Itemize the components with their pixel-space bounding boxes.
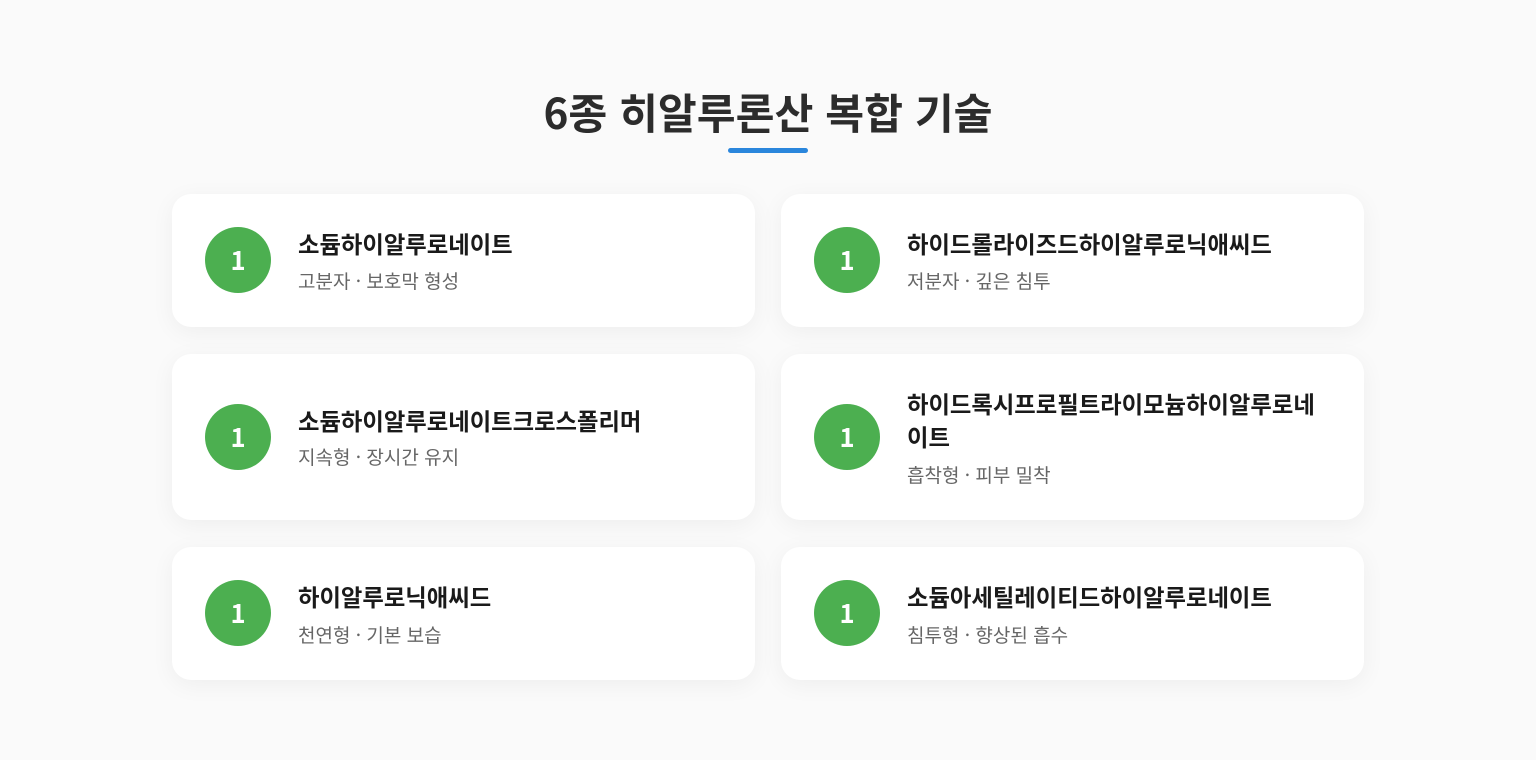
number badge [814, 226, 880, 292]
number badge: 1 [839, 418, 855, 455]
number badge: 1 [230, 418, 246, 455]
card description: 천연형 · 기본 보습 [298, 621, 442, 648]
number badge: 1 [230, 240, 246, 278]
card: sodium acetylated hyaluronate [781, 547, 1364, 680]
number badge [205, 404, 271, 470]
card: hydroxypropyltrimonium hyaluronate [781, 354, 1364, 520]
number badge [814, 404, 880, 470]
card title: 하이드록시프로필트라이모늄하이알루로네이트 [907, 386, 1315, 453]
title underline [728, 148, 808, 153]
card title: 소듐아세틸레이티드하이알루로네이트 [907, 579, 1272, 613]
card: sodium hyaluronate crosspolymer [172, 354, 755, 520]
number badge [205, 580, 271, 646]
card description: 침투형 · 향상된 흡수 [907, 621, 1068, 648]
number badge: 1 [230, 594, 246, 631]
card: sodium hyaluronate [172, 194, 755, 327]
number badge [205, 226, 271, 292]
card description: 흡착형 · 피부 밀착 [907, 461, 1051, 488]
number badge: 1 [839, 594, 855, 631]
card title: 소듐하이알루로네이트 [298, 226, 513, 260]
card description: 고분자 · 보호막 형성 [298, 267, 459, 294]
card title: 하이드롤라이즈드하이알루로닉애씨드 [907, 226, 1272, 260]
card: hyaluronic acid [172, 547, 755, 680]
card title: 소듐하이알루로네이트크로스폴리머 [298, 403, 641, 437]
card description: 저분자 · 깊은 침투 [907, 267, 1051, 294]
title: 6종 히알루론산 복합 기술 [543, 81, 993, 142]
card description: 지속형 · 장시간 유지 [298, 443, 459, 470]
number badge: 1 [839, 240, 855, 278]
card: hydrolyzed hyaluronic acid [781, 194, 1364, 327]
card title: 하이알루로닉애씨드 [298, 579, 491, 613]
number badge [814, 580, 880, 646]
